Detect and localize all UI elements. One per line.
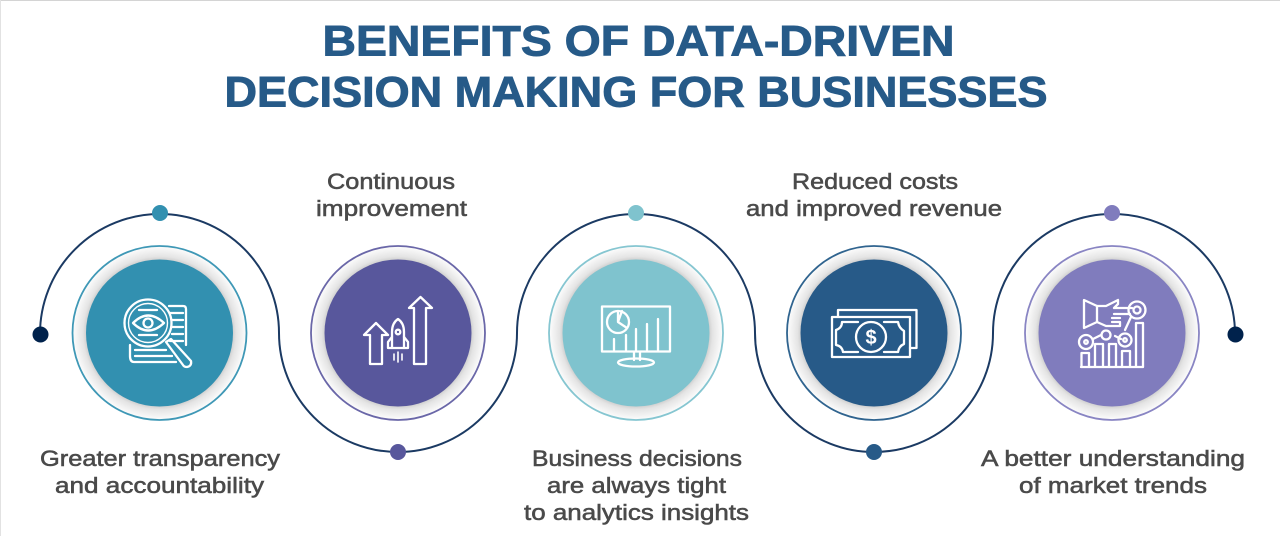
icon: rocket and arrows xyxy=(364,297,432,364)
label: step 5: A better understanding xyxy=(981,446,1245,471)
label: step 4: Reduced costs xyxy=(792,169,958,194)
icon: magnifier over document xyxy=(124,300,191,367)
label: step 4 xyxy=(746,169,1002,221)
end dot xyxy=(1228,326,1244,342)
icon: banknotes: $ xyxy=(865,327,877,349)
dot: step 3 xyxy=(628,205,644,221)
connecting wave line xyxy=(40,214,1235,452)
title: DECISION MAKING FOR BUSINESSES xyxy=(224,70,1048,116)
dot: step 5 xyxy=(1104,205,1120,221)
label: step 5: of market trends xyxy=(1019,473,1207,498)
label: step 5 xyxy=(981,446,1245,498)
panel: step 5 market trends xyxy=(1025,246,1199,420)
icon: monitor with charts xyxy=(602,306,670,366)
icon: banknotes xyxy=(832,310,916,357)
label: step 2 xyxy=(316,169,468,221)
label: step 3: are always tight xyxy=(547,473,727,498)
start dot xyxy=(32,326,48,342)
dot: step 2 xyxy=(390,444,406,460)
icon: hand pointing at chart xyxy=(1079,300,1146,367)
label: step 2: Continuous xyxy=(327,169,455,194)
label: step 4: and improved revenue xyxy=(746,196,1002,221)
dot: step 1 xyxy=(152,205,168,221)
label: step 2: improvement xyxy=(316,196,468,221)
label: step 3: Business decisions xyxy=(532,446,742,471)
title: BENEFITS OF DATA-DRIVEN xyxy=(322,18,954,66)
label: step 3 xyxy=(524,446,749,525)
panel: step 1 transparency xyxy=(72,246,246,420)
panel: step 2 improvement xyxy=(311,246,485,420)
dot: step 4 xyxy=(866,444,882,460)
label: step 1 xyxy=(40,446,281,498)
title xyxy=(224,18,1048,116)
label: step 1: Greater transparency xyxy=(40,446,281,471)
label: step 3: to analytics insights xyxy=(524,500,749,525)
panel: step 3 analytics xyxy=(549,246,723,420)
label: step 1: and accountability xyxy=(55,473,265,498)
panel: step 4 costs and revenue xyxy=(787,246,961,420)
